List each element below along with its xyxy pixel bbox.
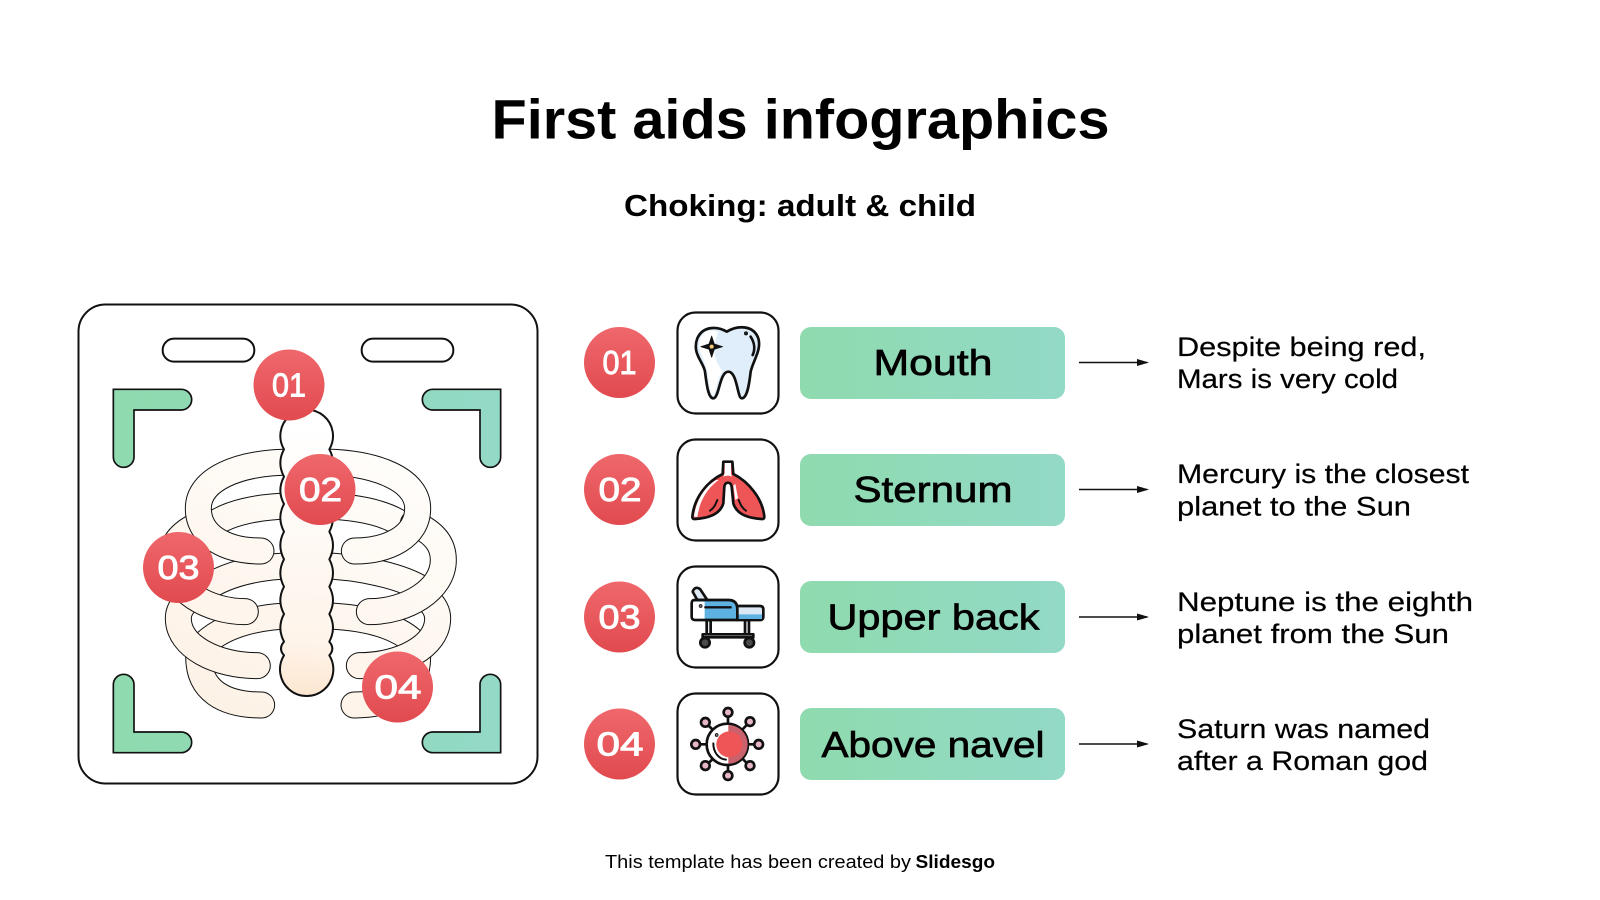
icon: virus — [678, 694, 778, 794]
arrow — [1079, 740, 1149, 748]
footer credit: This template has been created by — [605, 852, 911, 872]
description — [1177, 714, 1430, 776]
description: after a Roman god — [1177, 746, 1428, 776]
row 01: mouth — [584, 312, 1426, 414]
marker 03: 03 — [158, 549, 200, 586]
subtitle: Choking: adult & child — [624, 188, 976, 223]
label pills — [163, 339, 453, 362]
number badge 04: 04 — [596, 726, 644, 762]
description: planet to the Sun — [1177, 492, 1411, 522]
rib cage — [171, 462, 443, 705]
description: Saturn was named — [1177, 714, 1430, 744]
description: planet from the Sun — [1177, 619, 1449, 649]
arrow — [1079, 486, 1149, 493]
icon: tooth — [678, 312, 778, 414]
number badge 01: 01 — [602, 344, 636, 381]
description: Mercury is the closest — [1177, 459, 1470, 489]
icon: hospital bed — [678, 566, 778, 668]
marker 02 — [284, 454, 356, 525]
marker 04 — [362, 652, 433, 722]
row 03: upper back — [584, 566, 1473, 668]
number badge 04 — [584, 708, 655, 780]
label: above navel: Above navel — [822, 724, 1044, 765]
footer credit: Slidesgo — [916, 852, 995, 872]
description: Neptune is the eighth — [1177, 587, 1473, 617]
marker 04: 04 — [374, 668, 422, 706]
title: First aids infographics — [492, 88, 1110, 150]
spine — [280, 410, 333, 696]
arrow — [1079, 359, 1149, 366]
label: sternum — [800, 454, 1065, 526]
number badge 02: 02 — [598, 471, 642, 508]
label: mouth: Mouth — [874, 342, 992, 383]
description — [1177, 459, 1470, 522]
x-ray illustration — [113, 339, 501, 753]
row 02: sternum — [584, 440, 1470, 540]
panel: chest x-ray — [78, 304, 538, 784]
description — [1177, 587, 1473, 649]
description — [1177, 332, 1426, 394]
marker 01: 01 — [272, 366, 306, 404]
arrow — [1079, 614, 1149, 620]
number badge 01 — [584, 327, 655, 398]
label: above navel — [800, 708, 1065, 780]
marker 01 — [254, 350, 324, 420]
description: Mars is very cold — [1177, 364, 1398, 394]
corner brackets — [113, 389, 501, 753]
number badge 03: 03 — [598, 598, 640, 636]
number badge 03 — [584, 582, 655, 652]
label: sternum: Sternum — [854, 469, 1012, 510]
number badge 02 — [584, 454, 655, 525]
row 04: above navel — [584, 694, 1430, 794]
icon: lungs — [678, 440, 778, 540]
description: Despite being red, — [1177, 332, 1426, 362]
label: upper back: Upper back — [828, 596, 1041, 638]
label: upper back — [800, 581, 1065, 653]
marker 02: 02 — [299, 471, 342, 508]
label: mouth — [800, 327, 1065, 399]
marker 03 — [143, 532, 214, 603]
